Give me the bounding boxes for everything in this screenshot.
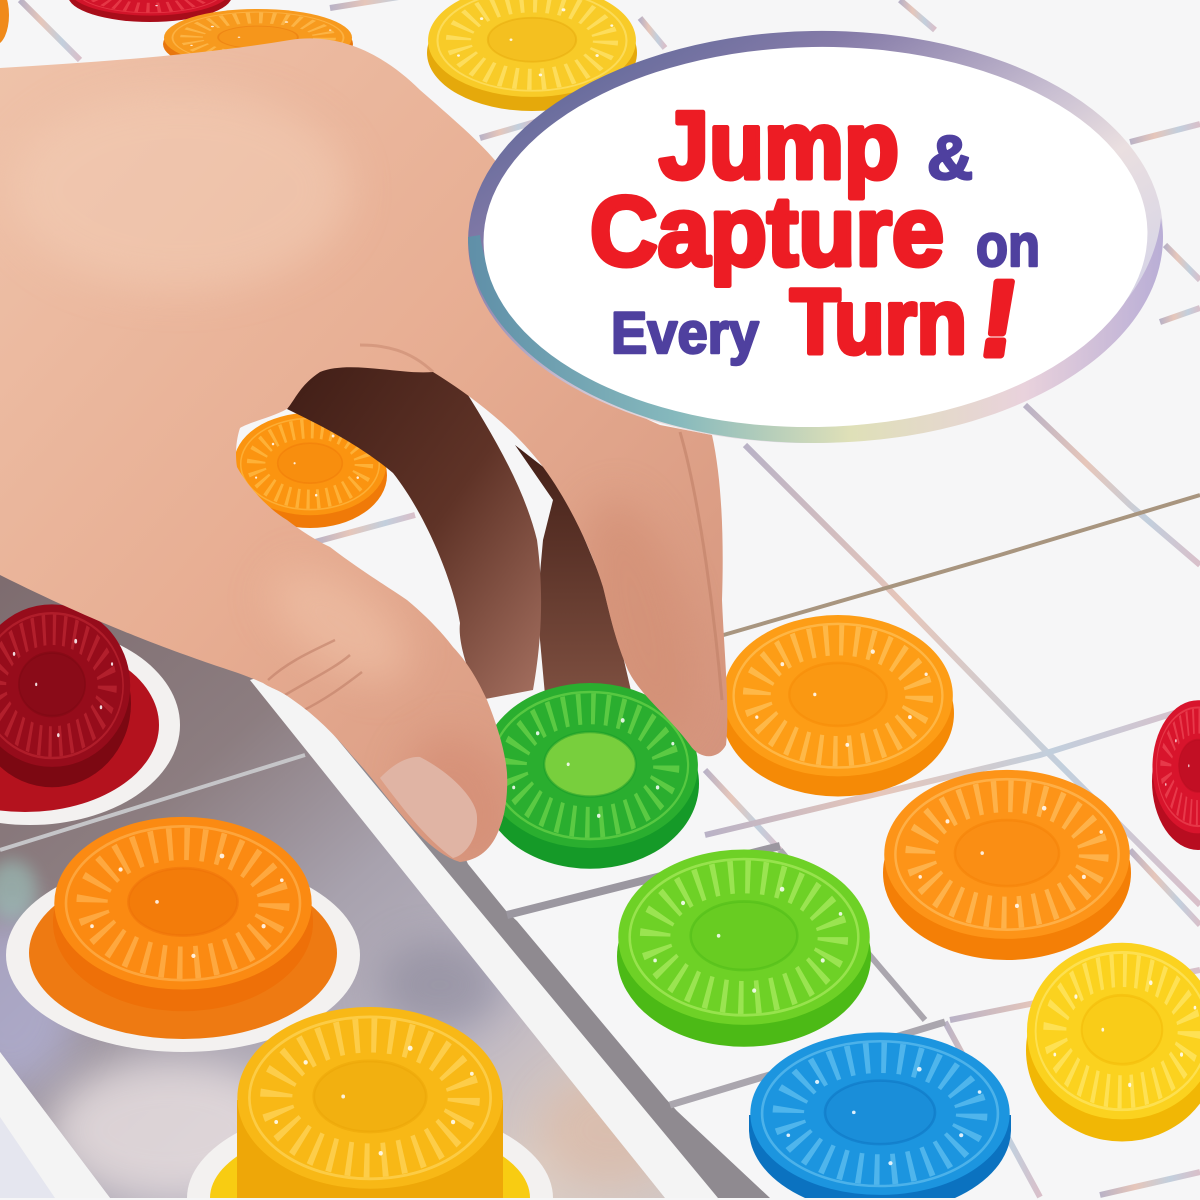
token: orange on circle	[53, 817, 313, 1011]
hand: palm, thumb and index finger	[0, 38, 727, 862]
little finger edge	[680, 432, 722, 700]
callout text: exclamation mark: !	[974, 259, 1024, 378]
token: dark red on circle	[0, 604, 131, 787]
token: red top	[68, 0, 232, 22]
token: yellow on circle	[237, 1007, 503, 1198]
thumb nail	[380, 757, 477, 858]
lower-left corner of hologram	[0, 1117, 55, 1198]
callout text: Jump: Jump	[659, 92, 899, 199]
token: blue	[749, 1032, 1011, 1198]
ring and middle fingers in shadow	[287, 340, 632, 700]
fold crease on the left of the board	[0, 755, 305, 850]
hologram border panel of the board	[0, 575, 665, 1198]
token: orange right	[883, 770, 1131, 960]
token: yellow right	[1026, 943, 1200, 1142]
token: lime green	[617, 849, 871, 1047]
token: orange under hand	[233, 413, 387, 528]
token: red right	[1152, 700, 1200, 850]
token: orange top-left edge	[0, 0, 9, 45]
hand shading overlays	[10, 90, 719, 885]
token: green being held	[481, 683, 699, 869]
token: orange upper right	[722, 615, 954, 796]
silver band beside the squares	[280, 670, 770, 1198]
callout text: on: on	[976, 212, 1040, 279]
callout text: Every: Every	[611, 301, 759, 366]
callout text: Capture: Capture	[590, 176, 944, 286]
red start circle	[0, 625, 180, 825]
token: orange top	[163, 9, 353, 74]
callout text: Turn: Turn	[790, 271, 967, 373]
silver grid line by the green token	[507, 846, 780, 915]
yellow start circle	[187, 1103, 553, 1198]
silver grid line below the lime token	[670, 1022, 945, 1105]
fold crease on the right of the board	[720, 495, 1200, 636]
orange start circle	[6, 858, 360, 1052]
lower-left white stripe	[0, 1052, 110, 1198]
silver grid line right of the lime token	[780, 850, 925, 1020]
callout text: ampersand: &	[927, 124, 973, 193]
callout oval	[464, 25, 1167, 449]
white stripe of the board	[250, 670, 718, 1198]
token: yellow top	[427, 0, 637, 111]
